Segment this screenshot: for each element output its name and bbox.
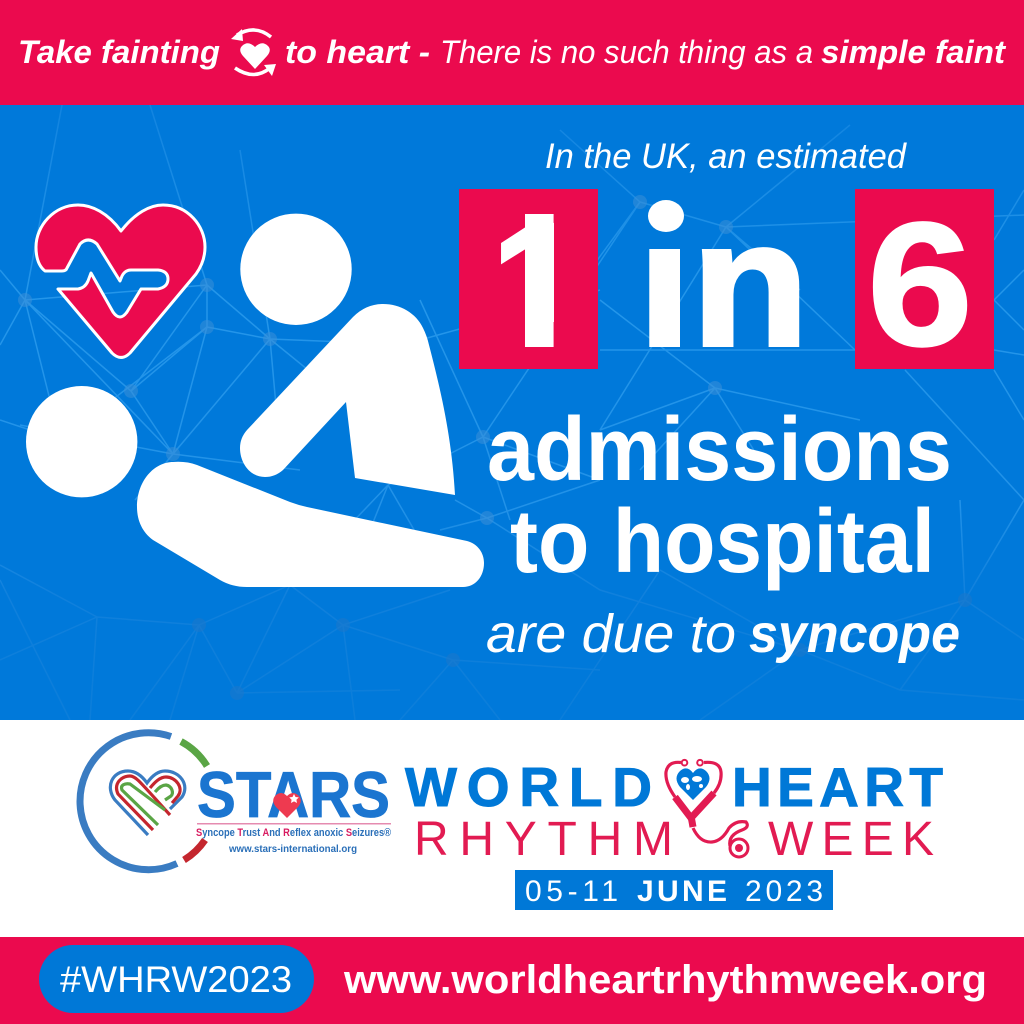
logo rule — [197, 823, 391, 824]
text: admissions to hospital — [487, 400, 952, 592]
icon: heart with circular arrows — [231, 29, 276, 76]
date box: 05-11 — [525, 875, 618, 908]
number box: 6: 6 — [867, 187, 973, 383]
text: are due to syncope: are due to — [486, 604, 736, 664]
statistic: 1 in 6 — [459, 184, 994, 383]
wordmark: HEART: HEART — [732, 756, 943, 818]
logo url: www.stars-international.org — [228, 844, 357, 855]
STARS wordmark: STARS — [197, 758, 390, 831]
icon: heart with pulse line — [36, 205, 205, 358]
logo nested heart — [110, 771, 185, 835]
word: in: in — [638, 184, 809, 383]
icon: stethoscope with globe heart — [666, 760, 748, 857]
hashtag pill: #WHRW2023 — [60, 959, 292, 1000]
icon: person giving first aid to a lying casualty — [26, 214, 484, 587]
banner text: simple faint: simple faint — [821, 34, 1006, 70]
hashtag pill — [39, 945, 314, 1013]
logo ring — [80, 733, 207, 870]
banner text: take fainting: Take fainting — [18, 34, 220, 70]
banner text: no simple faint: There is no such thing as a — [440, 34, 813, 70]
panel: white logo band — [0, 720, 1024, 937]
number box: 1: 1 — [490, 187, 588, 383]
date box: JUNE — [637, 875, 727, 908]
date box: 2023 — [745, 875, 823, 908]
text: are due to syncope: syncope — [749, 604, 960, 664]
logo: World Heart Rhythm Week — [405, 756, 943, 910]
logo: STARS — [80, 733, 391, 870]
logo strapline: Syncope Trust And Reflex anoxic Seizures® — [196, 827, 391, 839]
word: in — [648, 200, 800, 347]
text: admissions to hospital: admissions — [487, 400, 952, 500]
website url: www.worldheartrhythmweek.org — [343, 958, 987, 1002]
text: are due to syncope — [486, 604, 960, 664]
banner text: to heart: to heart - — [285, 34, 430, 70]
text: in the UK, an estimated: In the UK, an estimated — [545, 137, 908, 176]
text: admissions to hospital: to hospital — [510, 492, 935, 592]
panel: bottom red banner — [0, 937, 1024, 1024]
panel: main blue background — [0, 105, 1024, 720]
panel: top red banner — [0, 0, 1024, 105]
wordmark: WEEK: WEEK — [768, 813, 934, 866]
wordmark: WORLD: WORLD — [405, 756, 652, 818]
date box — [515, 870, 833, 910]
icon: small heart with star — [273, 793, 301, 818]
wordmark: RHYTHM: RHYTHM — [414, 813, 673, 866]
